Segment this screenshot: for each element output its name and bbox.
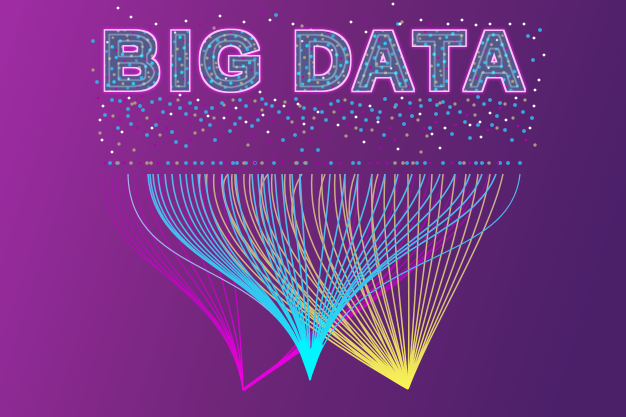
- dotted divider line: [105, 161, 520, 165]
- scattered data dots: [93, 4, 544, 155]
- cyan line bundle: [128, 174, 520, 381]
- cyan convergence spike: [297, 338, 323, 381]
- magenta line bundle: [105, 174, 488, 390]
- title: BIG DATA: BIG DATA: [103, 16, 522, 104]
- yellow line bundle: [199, 174, 503, 389]
